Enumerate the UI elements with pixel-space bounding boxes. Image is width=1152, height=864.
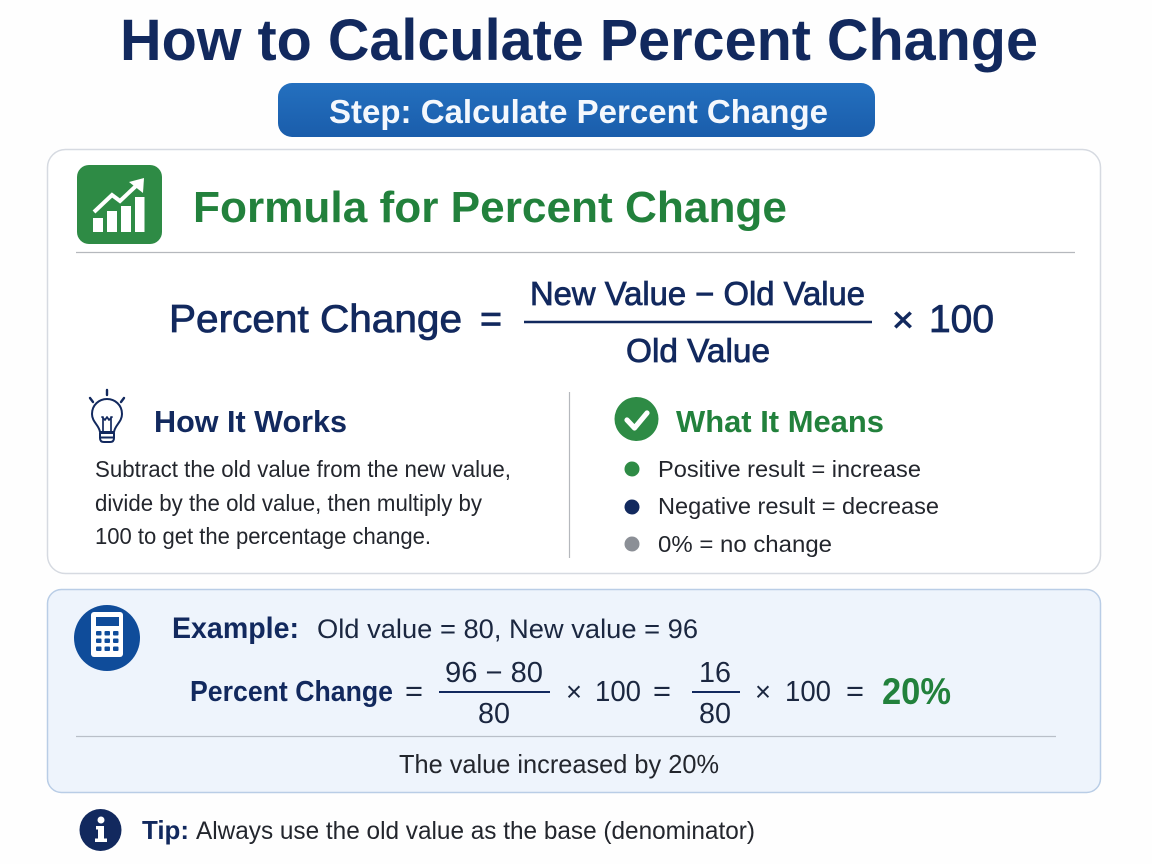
- explanation text: [95, 456, 511, 549]
- bullet: negative: Negative result = decrease: [658, 493, 939, 519]
- section: how it works: [90, 390, 511, 549]
- worked calculation: 100: [595, 676, 641, 708]
- bullet: no change: 0% = no change: [658, 531, 832, 557]
- explanation text: Subtract the old value from the new value,: [95, 456, 511, 482]
- icon: check mark: [614, 397, 658, 441]
- worked calculation: 20%: [882, 671, 951, 712]
- worked calculation: Percent Change: [190, 676, 393, 708]
- worked calculation: =: [846, 676, 864, 708]
- formula: New Value − Old Value: [530, 275, 865, 312]
- worked calculation: 100: [785, 676, 831, 708]
- formula: Old Value: [626, 332, 770, 369]
- example values: Old value = 80, New value = 96: [317, 614, 698, 644]
- worked calculation: 96 − 80: [445, 657, 543, 689]
- tip text: Tip:: [142, 815, 189, 845]
- worked calculation: ×: [755, 676, 771, 707]
- formula: [169, 275, 994, 369]
- formula: ×: [892, 299, 914, 340]
- step banner: Step: Calculate Percent Change: [329, 93, 828, 130]
- example values: [172, 612, 698, 645]
- worked calculation: ×: [566, 676, 582, 707]
- icon: info: [80, 809, 122, 851]
- formula: =: [480, 298, 502, 341]
- heading: what it means: What It Means: [676, 404, 884, 439]
- icon: light bulb: [90, 390, 124, 442]
- panel: formula: [48, 150, 1100, 574]
- result statement: The value increased by 20%: [399, 749, 719, 779]
- step banner: [278, 83, 875, 137]
- worked calculation: 16: [699, 657, 731, 689]
- explanation text: divide by the old value, then multiply by: [95, 490, 482, 516]
- formula: 100: [929, 298, 994, 341]
- heading: formula: Formula for Percent Change: [193, 183, 787, 232]
- title: How to Calculate Percent Change: [120, 8, 1038, 73]
- panel: example: [48, 590, 1100, 792]
- formula: Percent Change: [169, 298, 462, 341]
- section: what it means: [614, 397, 939, 557]
- worked calculation: 80: [478, 698, 510, 730]
- worked calculation: [190, 657, 951, 730]
- icon: growth chart: [77, 165, 162, 244]
- explanation text: 100 to get the percentage change.: [95, 523, 431, 549]
- example values: Example:: [172, 612, 299, 645]
- tip text: Always use the old value as the base (denominator): [196, 817, 755, 845]
- worked calculation: 80: [699, 698, 731, 730]
- icon: calculator: [74, 605, 140, 671]
- tip: [80, 809, 755, 851]
- worked calculation: =: [653, 676, 671, 708]
- worked calculation: =: [405, 676, 423, 708]
- heading: how it works: How It Works: [154, 404, 347, 439]
- bullet: positive: Positive result = increase: [658, 456, 921, 482]
